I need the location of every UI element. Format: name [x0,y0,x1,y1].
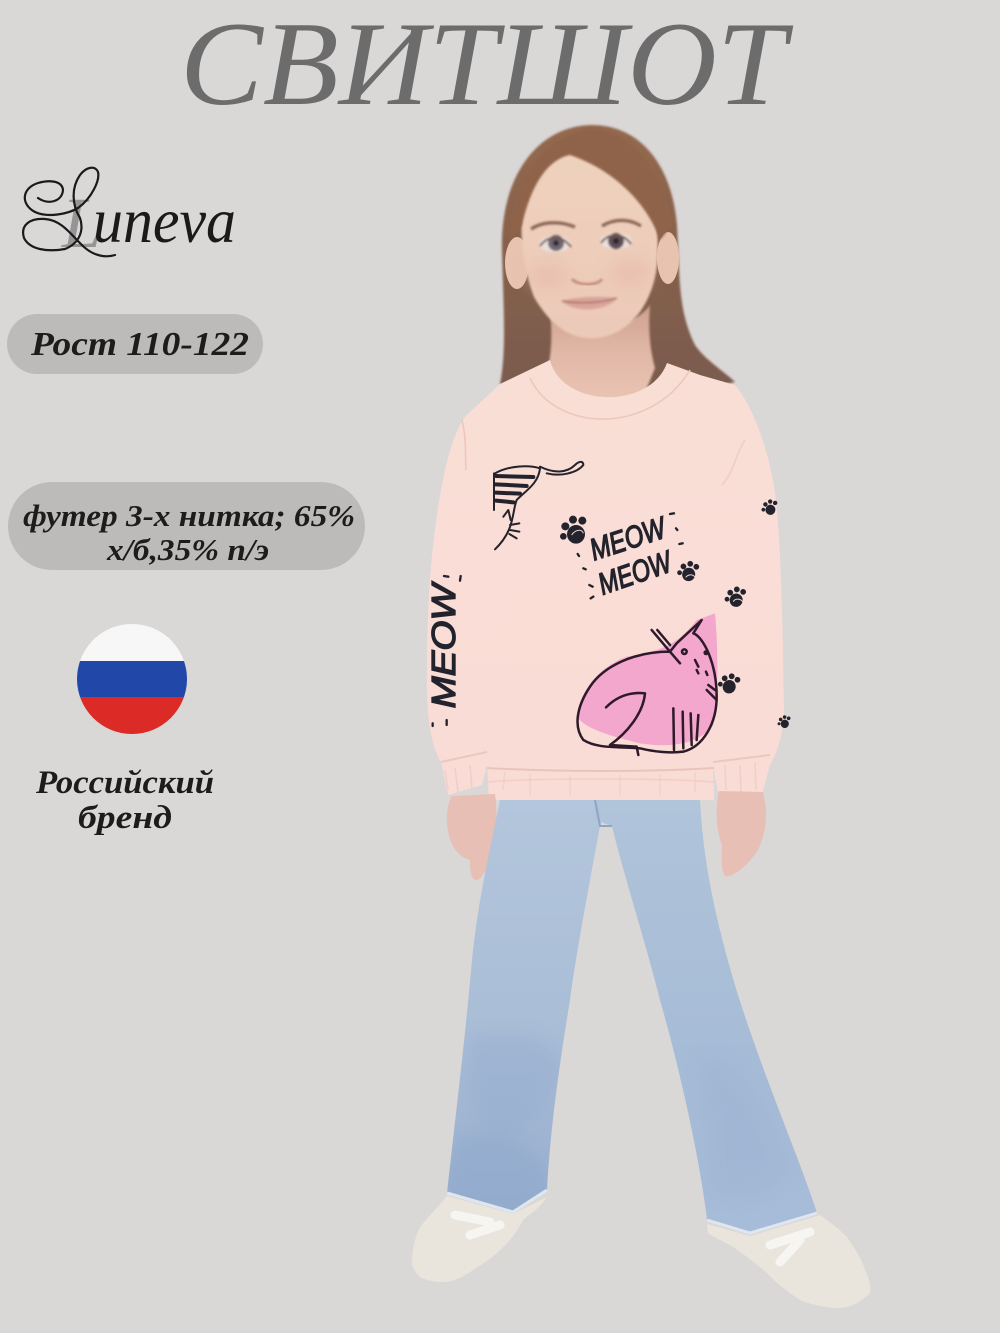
ears [505,232,679,289]
pill: fabric: футер 3-х нитка; 65% [23,498,355,533]
shoe details [455,1215,810,1262]
logo: Luneva [23,168,236,263]
russian brand text: Российский [35,765,214,801]
paw highlights [572,530,743,602]
pill: height: Рост 110-122 [30,326,249,363]
left hand [447,794,497,880]
fringe [510,128,672,240]
logo: Luneva: uneva [93,185,236,256]
MEOW lettering: MEOW [586,510,672,567]
left shoe [412,1196,547,1282]
sweatshirt prints [426,462,791,755]
pill: fabric: х/б,35% п/э [106,532,269,567]
paws [560,516,586,544]
right shoe [707,1215,870,1308]
mouth [562,297,617,309]
pill: height [7,314,263,374]
pill: fabric [8,482,365,570]
nose [572,279,602,284]
sweatshirt prints: MEOW [426,580,463,708]
sweatshirt prints: MEOW [594,544,678,602]
title: СВИТШОТ [180,0,794,130]
jeans [440,795,825,1240]
eyes and brows [531,220,641,252]
right hand [717,791,766,876]
russian brand text: бренд [78,800,172,836]
logo: Luneva: L [61,183,102,263]
girl figure [412,125,870,1308]
icon: russian flag [77,624,187,734]
dashes [433,513,683,726]
hair back [500,125,735,400]
cheeks [528,258,650,289]
pink patch [577,613,717,745]
russian brand text [35,765,214,836]
face [522,150,658,338]
sweatshirt details [441,370,770,796]
neck [548,305,655,405]
big cat [578,620,717,755]
striped cat [494,462,583,549]
sweatshirt [427,360,784,800]
